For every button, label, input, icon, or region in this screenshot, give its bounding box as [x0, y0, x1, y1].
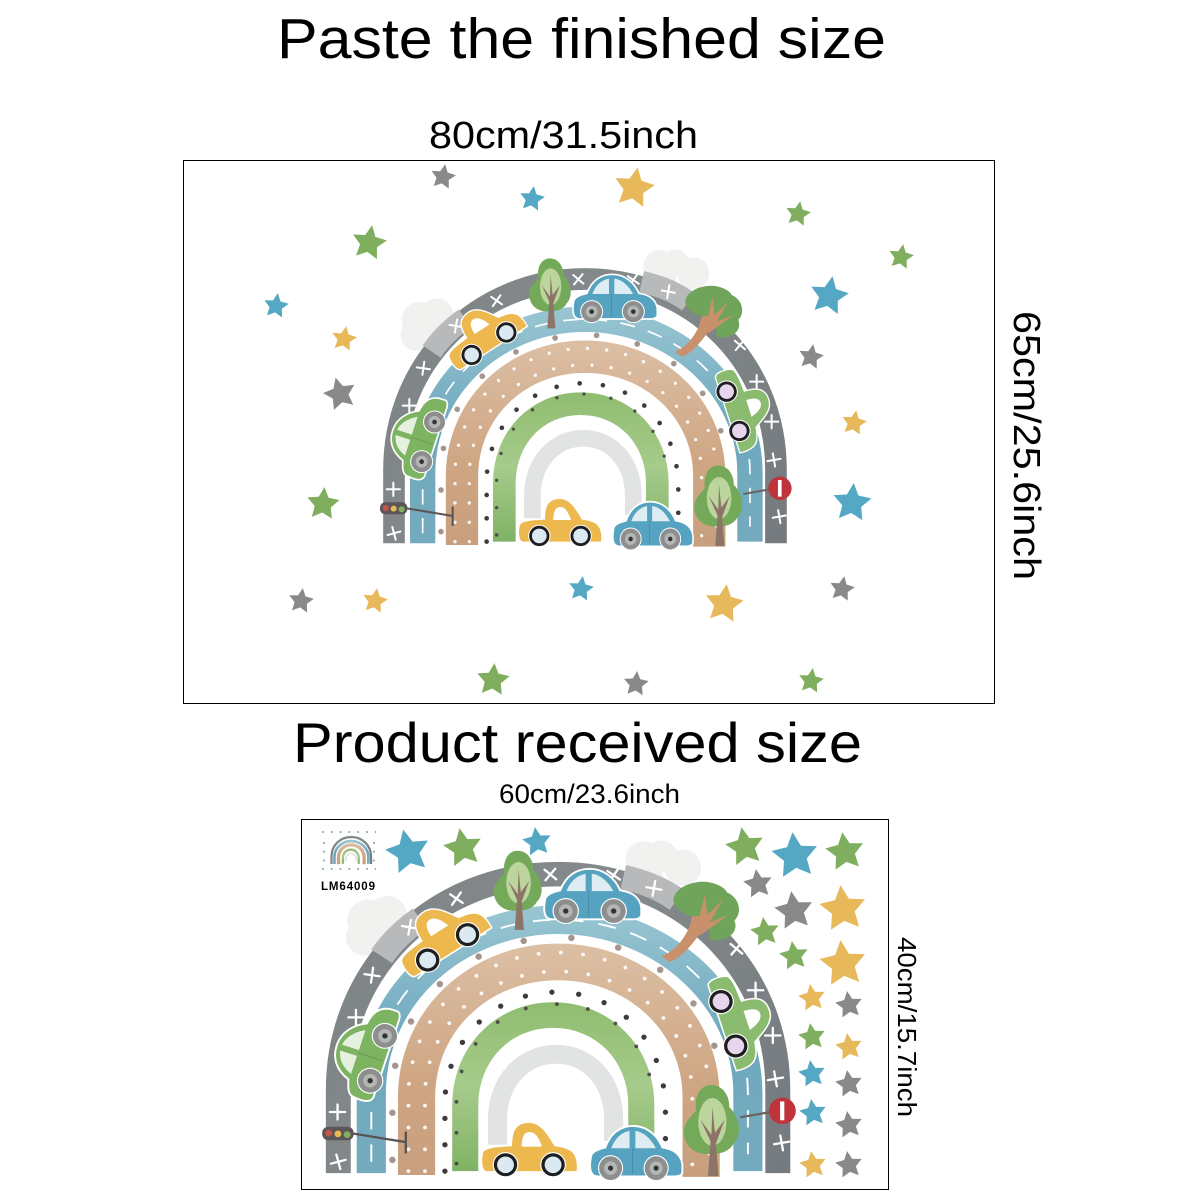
scattered stars — [262, 162, 915, 696]
heading: product received size: Product received size — [293, 711, 862, 774]
rainbow scene — [322, 841, 796, 1181]
width label: finished size: 80cm/31.5inch — [429, 115, 698, 157]
width label: received size: 60cm/23.6inch — [499, 779, 680, 809]
thumbnail rainbow — [322, 832, 376, 869]
rainbow scene — [380, 249, 792, 550]
height label: received size: 40cm/15.7inch — [892, 937, 922, 1117]
panel: finished size — [184, 160, 994, 704]
title: Paste the finished size — [277, 7, 886, 71]
product code: LM64009 — [321, 881, 375, 893]
height label: finished size: 65cm/25.6inch — [1005, 311, 1047, 580]
sticker stars — [382, 824, 868, 1178]
panel: received size — [302, 820, 888, 1190]
